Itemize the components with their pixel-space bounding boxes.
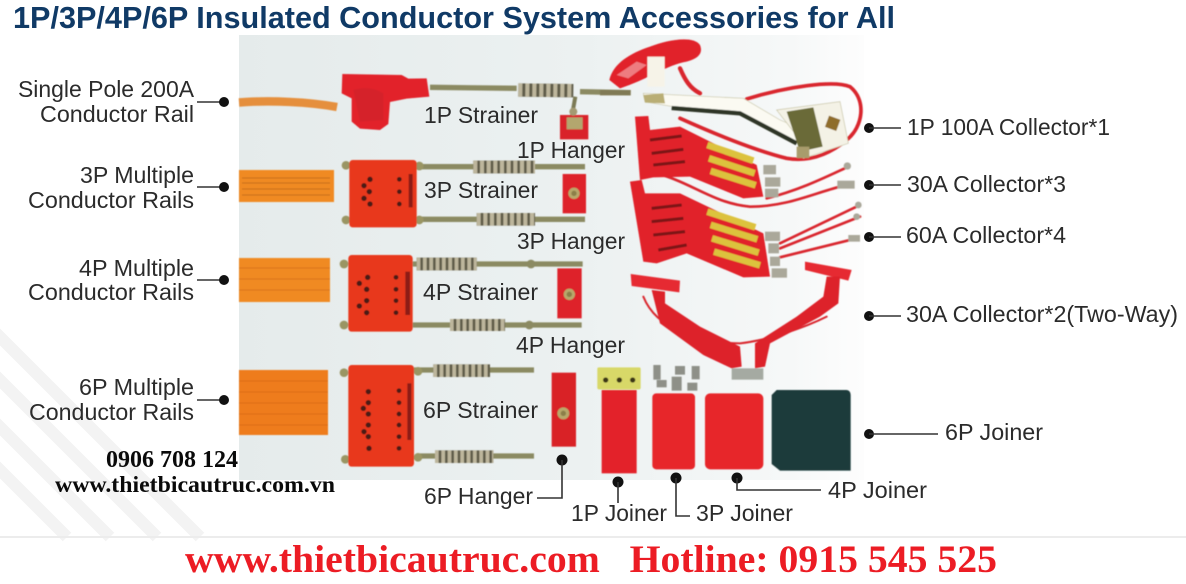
photo panel background	[239, 35, 864, 480]
label: two-way collector: 30A Collector*2(Two-Way)	[906, 301, 1178, 327]
centre labels: 6P Strainer	[423, 397, 538, 423]
centre labels: 1P Strainer	[424, 102, 538, 128]
label: 6P joiner	[864, 419, 1043, 445]
30A collector set of three	[635, 116, 855, 207]
label: 60A collector: 60A Collector*4	[906, 222, 1066, 248]
collector two-way and joiners	[597, 262, 852, 473]
6P conductor rail	[239, 370, 328, 435]
label: single pole rail: Single Pole 200A	[18, 76, 195, 102]
centre labels: 3P Strainer	[424, 177, 538, 203]
centre labels: 1P Hanger	[517, 137, 625, 163]
label: 6P joiner: 6P Joiner	[945, 419, 1043, 445]
label: 6P rails: 6P Multiple	[79, 374, 194, 400]
3P joiner	[652, 393, 695, 469]
1P hanger	[560, 97, 588, 139]
label: single pole rail: Conductor Rail	[40, 101, 194, 127]
rail samples	[239, 101, 337, 435]
label: 4P rails	[28, 255, 229, 305]
centre labels	[423, 102, 625, 423]
right callouts	[864, 114, 1178, 445]
label: single pole rail	[18, 76, 229, 127]
left callouts	[18, 76, 229, 425]
1P joiner	[597, 367, 641, 473]
3P hanger	[563, 174, 586, 213]
collectors	[600, 39, 862, 278]
label: 3P joiner: 3P Joiner	[696, 500, 793, 526]
label: 3P rails	[28, 162, 229, 213]
label: 4P joiner	[732, 472, 927, 503]
label: 1P 100A collector: 1P 100A Collector*1	[907, 114, 1110, 140]
product photo area	[239, 39, 862, 473]
1P 100A collector	[600, 39, 861, 159]
4P joiner	[705, 393, 763, 469]
60A collector set of four	[630, 180, 862, 278]
label: 3P rails: 3P Multiple	[80, 162, 194, 188]
label: 6P hanger: 6P Hanger	[424, 483, 533, 509]
label: 4P rails: 4P Multiple	[79, 255, 194, 281]
label: 6P hanger	[424, 454, 568, 509]
connector hardware	[653, 365, 700, 391]
lower strainers and hangers	[340, 255, 583, 467]
bottom callouts	[424, 454, 927, 526]
label: 30A collector: 30A Collector*3	[907, 171, 1066, 197]
centre labels: 3P Hanger	[517, 228, 625, 254]
label: 4P joiner: 4P Joiner	[828, 477, 927, 503]
single pole conductor rail	[239, 101, 337, 107]
label: 3P joiner	[670, 472, 793, 526]
centre labels: 4P Strainer	[423, 279, 538, 305]
label: 3P rails: Conductor Rails	[28, 187, 194, 213]
label: 1P joiner: 1P Joiner	[571, 500, 667, 526]
4P strainer	[340, 255, 583, 332]
30A two-way collector	[631, 262, 852, 380]
6P strainer	[340, 365, 534, 467]
6P joiner	[772, 390, 851, 471]
3P strainer	[342, 160, 585, 227]
1P strainer	[342, 74, 631, 130]
phone number: 0906 708 124	[106, 447, 238, 473]
label: 6P rails	[29, 374, 229, 425]
3P conductor rail	[239, 170, 334, 202]
4P hanger	[557, 268, 582, 318]
centre labels: 4P Hanger	[516, 332, 625, 358]
title: 1P/3P/4P/6P Insulated Conductor System Accessories for All	[13, 1, 895, 35]
4P conductor rail	[239, 258, 330, 302]
footer contact line: www.thietbicautruc.com Hotline: 0915 545 525	[185, 537, 997, 581]
label: 4P rails: Conductor Rails	[28, 279, 194, 305]
6P hanger	[552, 373, 576, 447]
label: 1P joiner	[571, 476, 667, 526]
upper strainers and hangers	[342, 74, 631, 227]
website: www.thietbicautruc.com.vn	[55, 472, 335, 498]
label: 6P rails: Conductor Rails	[29, 399, 194, 425]
